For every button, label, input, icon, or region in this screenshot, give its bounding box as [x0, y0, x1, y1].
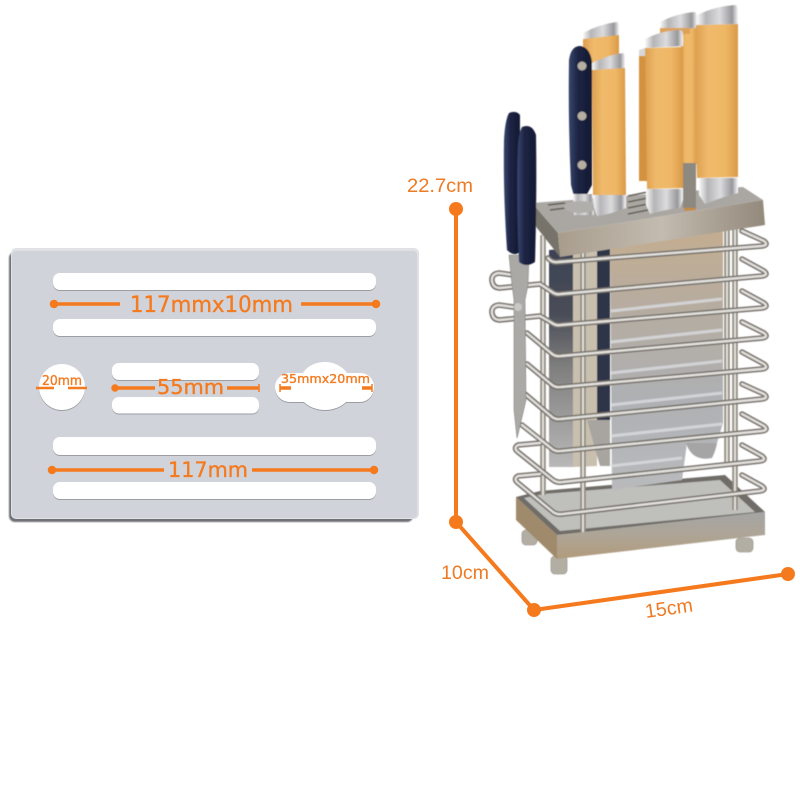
- dimension: 55mm: 55mm: [157, 375, 224, 399]
- plate body: [9, 248, 419, 522]
- light gap between reflections: [573, 246, 597, 467]
- knife handle: front center: [645, 30, 683, 214]
- base tray: [516, 475, 765, 559]
- dimension: 35mmx20mm: [280, 372, 372, 392]
- dimension: 117mmx10mm: [52, 293, 378, 318]
- dimension: 55mm: [113, 375, 259, 399]
- rack feet: [522, 530, 753, 574]
- dark blade reflection: [549, 248, 573, 467]
- dimension: 20mm: 20mm: [42, 374, 82, 389]
- scissors handles: [504, 112, 536, 265]
- diagonal blade edge: [587, 420, 610, 466]
- knife block top: [532, 187, 763, 233]
- product illustration: knife rack: [492, 5, 766, 574]
- knife handle: back center: [639, 12, 697, 211]
- rack vertical posts: [543, 215, 735, 532]
- height label: 22.7cm: [407, 175, 473, 197]
- wire rungs: [492, 231, 766, 514]
- dimension: 117mmx10mm: 117mmx10mm: [130, 293, 293, 318]
- size arrows around the rack: [407, 175, 795, 623]
- keyhole shaped hole: [275, 362, 374, 411]
- knife handle: navy with rivets: [564, 46, 596, 215]
- knife handle: front left: [592, 53, 626, 216]
- long slots, lower pair: [53, 437, 376, 500]
- dimension: 117mm: 117mm: [168, 458, 248, 482]
- scissors blade: [509, 255, 529, 438]
- blade tip: [686, 443, 717, 459]
- long slots, upper pair: [53, 273, 376, 337]
- dark strip beside the panel: [597, 245, 610, 420]
- knife block front and side faces: [532, 200, 765, 257]
- round hole: [39, 364, 85, 411]
- knife handle: back left: [583, 22, 619, 66]
- blade reflection stripes: [611, 299, 722, 466]
- dimension lines with dots: [449, 202, 795, 617]
- width label: 15cm: [644, 594, 694, 623]
- knife handle: right tall: [695, 5, 738, 204]
- short slots, middle pair: [112, 363, 259, 414]
- back panel of the blades: [610, 228, 723, 490]
- depth label: 10cm: [441, 562, 489, 584]
- mounting plate diagram: [9, 248, 419, 522]
- dimension: 117mm: [50, 458, 376, 482]
- block slots: [548, 192, 648, 214]
- dimension: 35mmx20mm: 35mmx20mm: [281, 372, 370, 386]
